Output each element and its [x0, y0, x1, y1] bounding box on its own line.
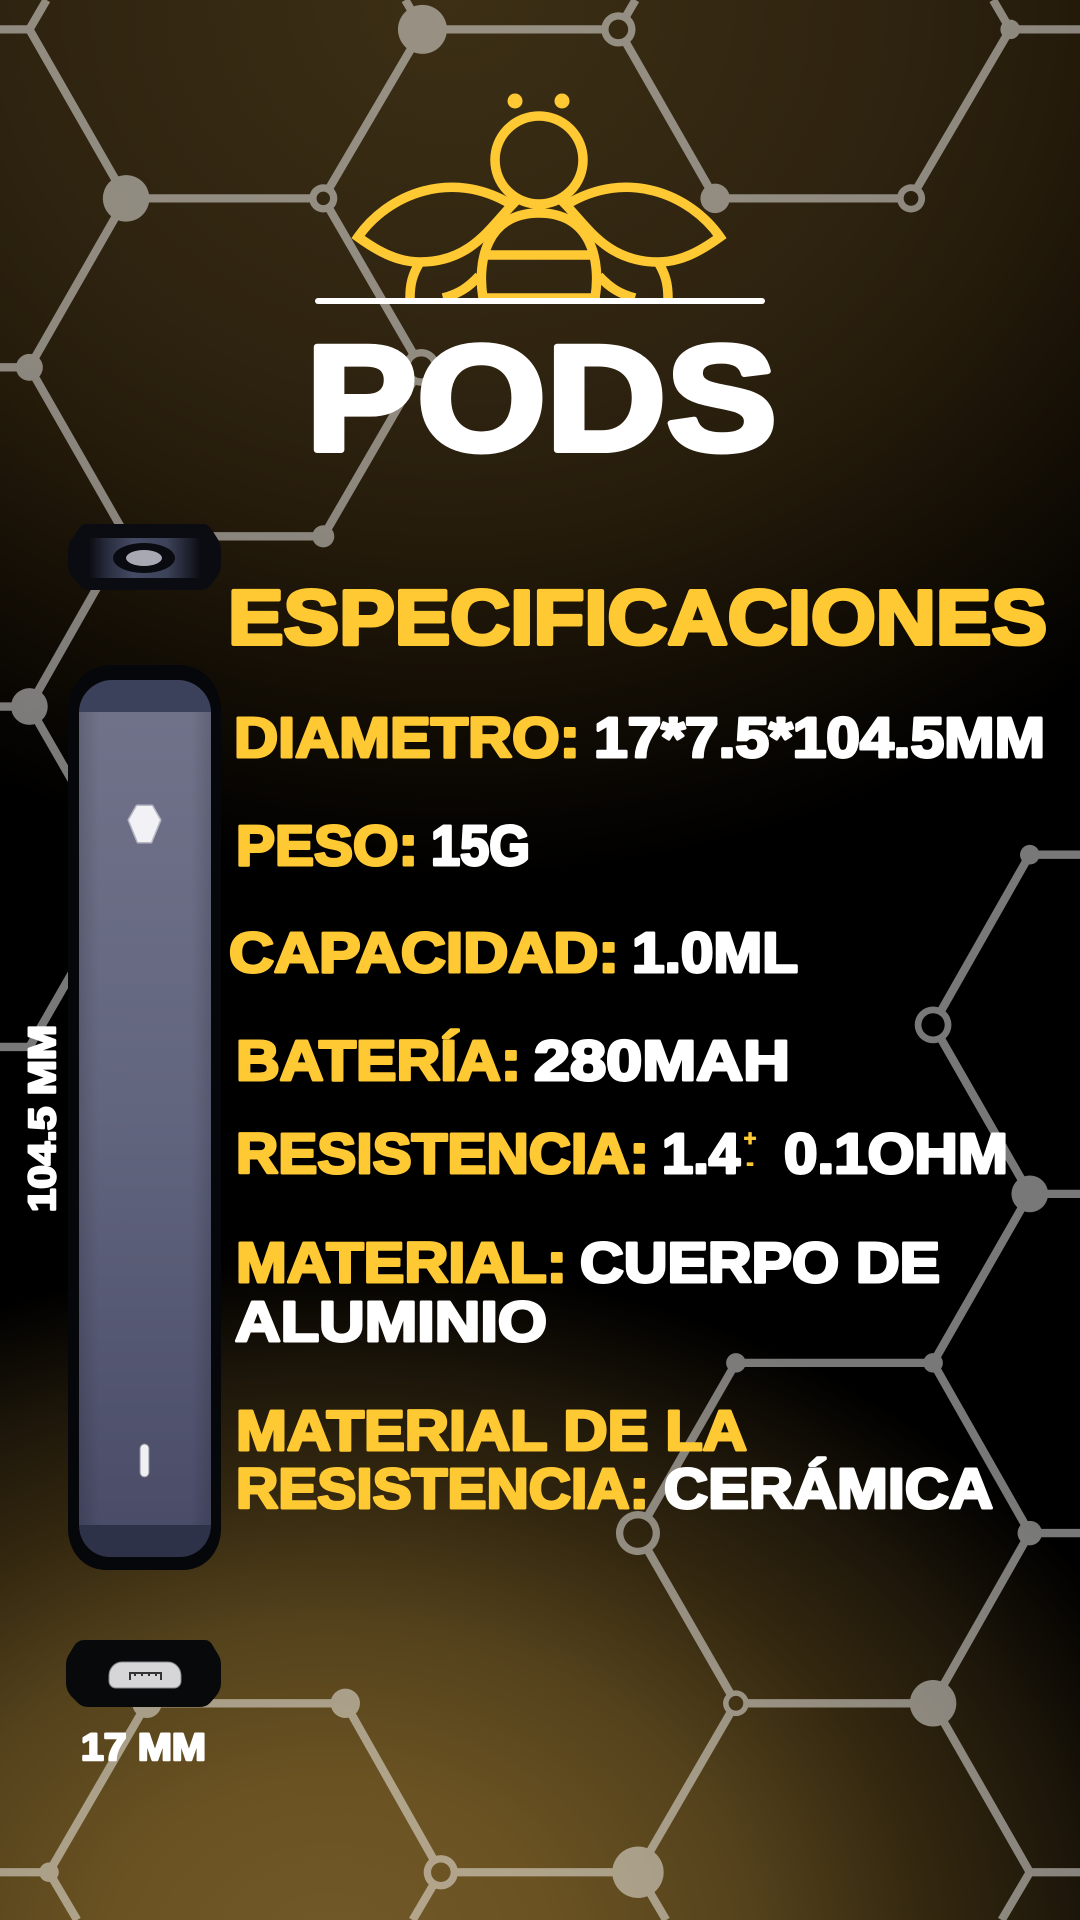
bee lower wings — [410, 262, 668, 298]
spec: diametro: 17*7.5*104.5MM — [594, 706, 1045, 770]
spec: resistencia: 0.1OHM — [784, 1122, 1008, 1186]
spec: diametro — [234, 706, 1045, 770]
device: bottom view — [66, 1640, 221, 1707]
spec: peso: 15G — [431, 814, 530, 878]
bee right wing — [566, 187, 720, 262]
spec: peso: PESO: — [236, 814, 418, 878]
spec: material de la resistencia — [236, 1399, 993, 1521]
title: PODS: PODS — [306, 314, 777, 482]
device: top view — [68, 524, 221, 590]
spec: diametro: DIAMETRO: — [234, 706, 580, 770]
spec list — [229, 706, 1045, 1521]
dimension label: height: 104.5 MM — [22, 1025, 64, 1212]
usb port — [109, 1662, 181, 1688]
spec: resistencia: RESISTENCIA: — [236, 1122, 649, 1186]
spec: resistencia: - — [746, 1150, 754, 1175]
spec: material de la resistencia: CERÁMICA — [664, 1457, 993, 1521]
bee head — [495, 116, 583, 204]
heading: especificaciones: ESPECIFICACIONES — [228, 575, 1047, 661]
spec: material: ALUMINIO — [235, 1290, 547, 1354]
spec: bateria: BATERÍA: — [236, 1029, 521, 1093]
indicator: slit — [140, 1444, 149, 1477]
spec: resistencia: 1.4 — [662, 1122, 740, 1186]
bee body — [481, 213, 597, 298]
spec: material: MATERIAL: — [236, 1231, 567, 1295]
spec: material de la resistencia: RESISTENCIA: — [236, 1457, 649, 1521]
spec: bateria: 280MAH — [534, 1029, 790, 1093]
spec: capacidad: CAPACIDAD: — [229, 921, 619, 985]
spec: resistencia — [236, 1122, 1008, 1186]
indicator: led — [129, 806, 160, 842]
dimension label: width: 17 MM — [81, 1727, 206, 1769]
spec: resistencia: + — [744, 1126, 756, 1151]
spec: material de la resistencia: MATERIAL DE LA — [236, 1399, 747, 1463]
divider line — [315, 298, 765, 304]
spec: peso — [236, 814, 530, 878]
spec: material — [235, 1231, 940, 1354]
spec: capacidad — [229, 921, 798, 985]
spec: material: CUERPO DE — [580, 1231, 940, 1295]
bee antennae — [508, 94, 570, 108]
spec: bateria — [236, 1029, 790, 1093]
logo: bee — [358, 94, 720, 298]
spec: capacidad: 1.0ML — [632, 921, 798, 985]
bee left wing — [358, 187, 512, 262]
device: body — [68, 665, 221, 1570]
